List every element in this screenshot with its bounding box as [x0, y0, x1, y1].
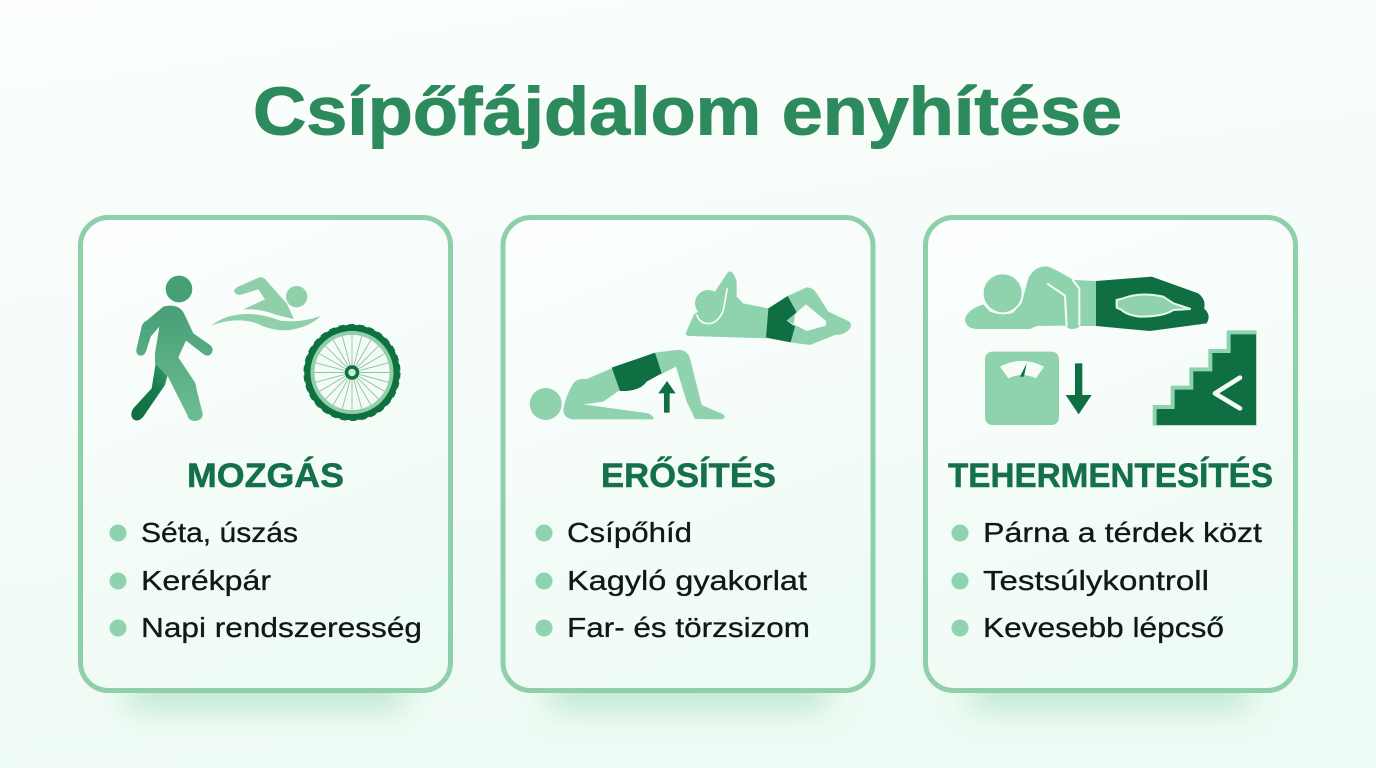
icon: glute bridge exercise: [530, 350, 725, 420]
list: erősítés: Csípőhíd: [567, 517, 692, 548]
list: mozgás: Napi rendszeresség: [141, 612, 422, 643]
list: erősítés: Kagyló gyakorlat: [567, 565, 807, 596]
icon: swimmer: [212, 277, 321, 330]
title: Csípőfájdalom enyhítése: [253, 74, 1122, 150]
list: mozgás: Kerékpár: [141, 565, 271, 596]
list: erősítés: Far- és törzsizom: [567, 612, 810, 643]
list: mozgás: [110, 517, 422, 643]
icon: up arrow: [658, 381, 676, 413]
icon: weighing scale: [985, 352, 1059, 425]
heading: erősítés: ERŐSÍTÉS: [601, 457, 776, 495]
icon: bicycle wheel: [304, 325, 400, 420]
list: tehermentesítés: Párna a térdek közt: [983, 517, 1262, 548]
heading: tehermentesítés: TEHERMENTESÍTÉS: [948, 457, 1273, 495]
panel: tehermentesítés: [926, 218, 1296, 708]
list: tehermentesítés: Testsúlykontroll: [983, 565, 1209, 596]
icon: walking person: [131, 276, 213, 421]
icon: stairs: [1153, 330, 1257, 426]
icon: clamshell exercise: [686, 271, 851, 345]
list: tehermentesítés: [952, 517, 1262, 643]
list: erősítés: [536, 517, 810, 643]
panel: mozgás: [80, 218, 450, 708]
panel: erősítés: [503, 218, 873, 708]
heading: mozgás: MOZGÁS: [187, 457, 344, 495]
list: tehermentesítés: Kevesebb lépcső: [983, 612, 1224, 643]
icon: down arrow: [1066, 363, 1092, 414]
list: mozgás: Séta, úszás: [141, 517, 298, 548]
icon: side sleeper with pillow between knees: [965, 266, 1209, 331]
